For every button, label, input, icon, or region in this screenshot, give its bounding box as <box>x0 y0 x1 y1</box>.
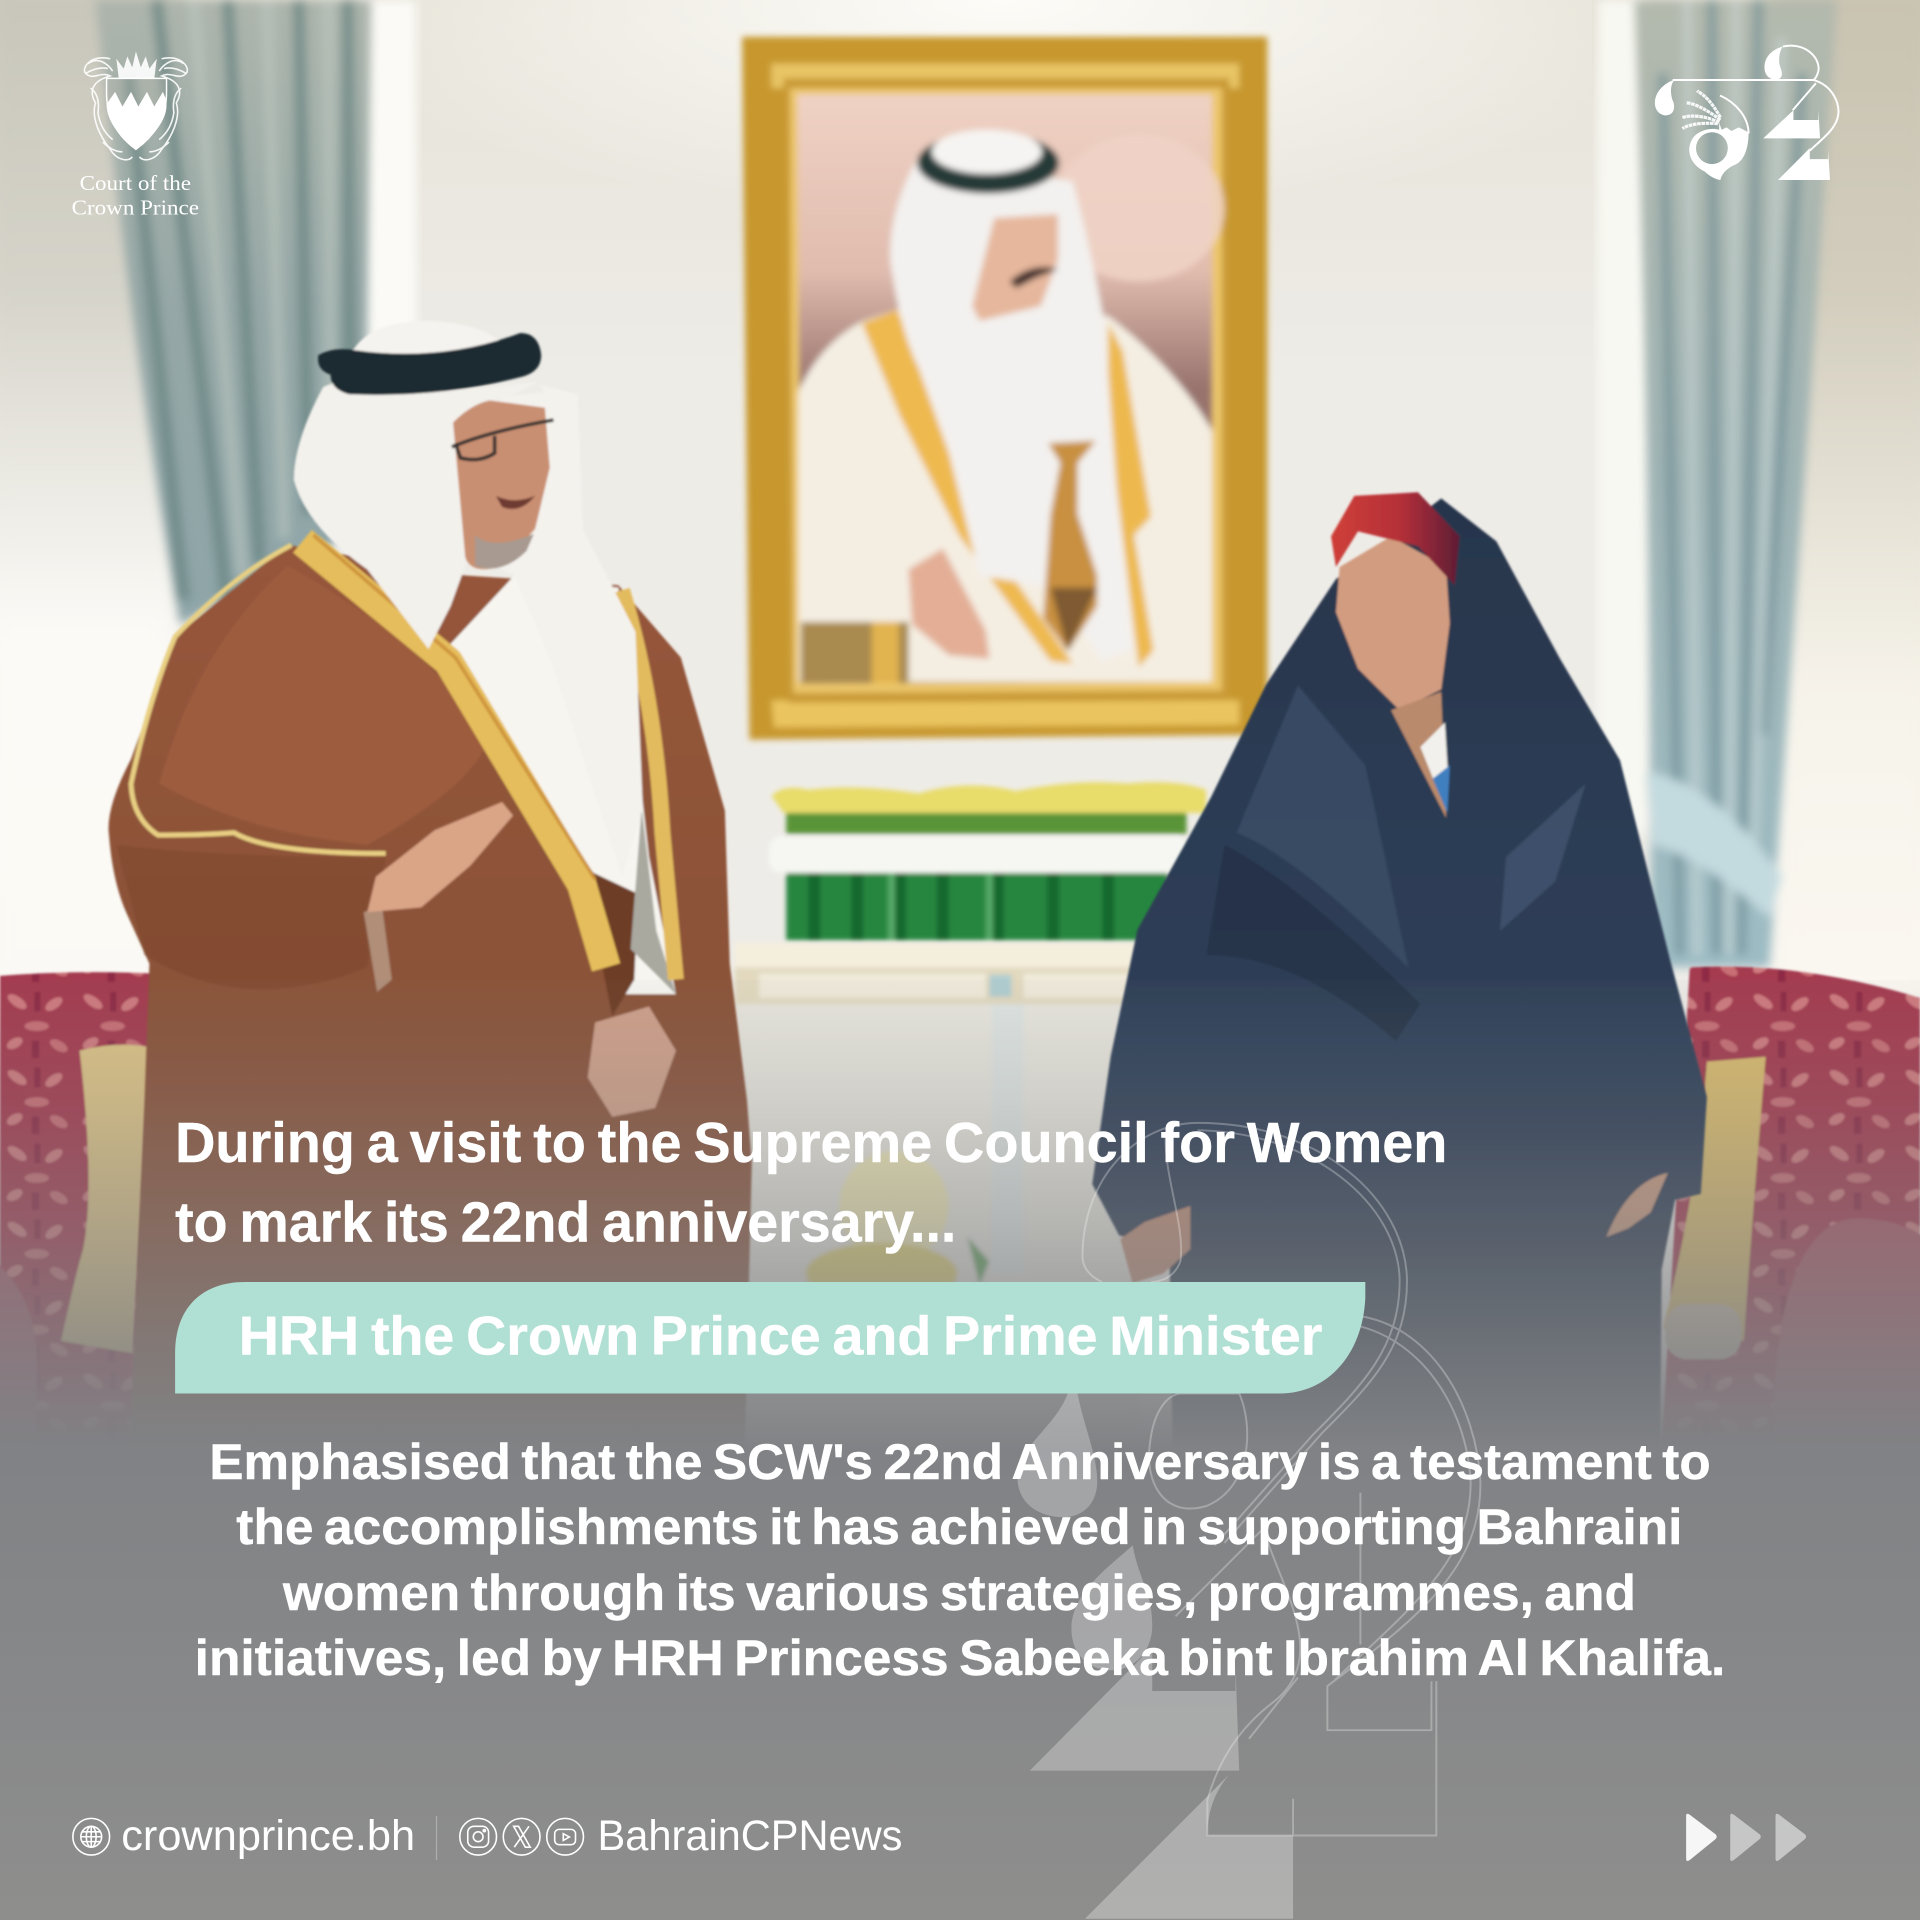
right hand <box>1607 1173 1668 1237</box>
filled triangle upper <box>1030 1647 1239 1771</box>
canvas cloud <box>1053 135 1224 282</box>
body text: initiatives, led by HRH Princess Sabeeka bint Ibrahim Al Khalifa. <box>195 1630 1725 1686</box>
footer: website and social handles <box>73 1812 902 1860</box>
bright strip beside left curtain <box>361 0 416 343</box>
crown <box>116 51 157 78</box>
beard <box>475 534 534 569</box>
body text <box>195 1434 1725 1686</box>
ring pearl shell <box>1689 122 1749 180</box>
arrows: next page <box>1686 1814 1806 1861</box>
crest label: Court of the <box>80 171 191 195</box>
curtain: right <box>1635 0 1837 967</box>
left wall corner <box>0 0 184 1029</box>
mouth <box>496 496 535 509</box>
body text: Emphasised that the SCW's 22nd Anniversary is a testament to <box>209 1434 1711 1490</box>
yellow roses <box>771 782 1206 813</box>
heading: visit context: During a visit to the Supreme Council for Women <box>175 1111 1447 1174</box>
pillow <box>1665 1304 1741 1359</box>
crest <box>84 51 187 160</box>
triangle upper <box>1763 110 1820 138</box>
canvas <box>797 94 1212 683</box>
heading: visit context: to mark its 22nd anniversary... <box>175 1191 956 1254</box>
clasped hands <box>588 1007 676 1117</box>
painted figure: chair <box>801 622 909 682</box>
filled triangle lower <box>1085 1774 1293 1919</box>
lower sleeve shade <box>116 845 386 989</box>
wall light glow <box>416 0 1592 367</box>
dark folds <box>1206 845 1420 1041</box>
body text: women through its various strategies, programmes, and <box>282 1565 1636 1621</box>
painted figure: dagger <box>1043 441 1097 651</box>
triangle lower <box>1778 148 1830 180</box>
painted figure: face <box>972 214 1058 321</box>
painted figure: hand <box>909 549 989 659</box>
chest gold trim <box>302 541 606 967</box>
inner dark sash belt <box>591 872 638 1016</box>
raised hand <box>367 802 513 912</box>
table flowers <box>839 1151 949 1261</box>
painted figure: agal <box>917 132 1059 193</box>
frame <box>742 37 1267 740</box>
painted figure: headdress <box>890 157 1133 661</box>
banner: HRH the Crown Prince and Prime Minister: HRH the Crown Prince and Prime Minister <box>239 1304 1322 1366</box>
left drop <box>1655 80 1675 115</box>
sofa: left <box>0 972 153 1592</box>
watermark: large stylised 22 <box>1017 1123 1480 1919</box>
handle: BahrainCPNews <box>598 1812 902 1860</box>
curtain: left <box>96 0 371 624</box>
arm <box>0 1249 37 1469</box>
palm fronds <box>1682 91 1720 129</box>
blouse white <box>1420 722 1449 784</box>
top drop <box>1764 47 1783 80</box>
ghutra headdress <box>294 384 643 877</box>
heading: visit context <box>175 1111 1447 1254</box>
left hand <box>1120 1206 1190 1283</box>
bright strip beside right curtain <box>1598 0 1647 833</box>
emblem: Court of the Crown Prince: Crown Prince <box>72 195 199 219</box>
greens <box>786 813 1187 834</box>
table <box>735 943 1139 1518</box>
face <box>1336 536 1450 710</box>
website: crownprince.bh <box>121 1812 415 1860</box>
painted figure: cap <box>932 130 1042 174</box>
face <box>453 400 550 569</box>
glasses <box>452 420 553 460</box>
mantling <box>84 58 187 160</box>
cushion <box>61 1045 149 1353</box>
icon: youtube <box>547 1818 583 1855</box>
cap <box>350 321 504 362</box>
painted figure: moustache <box>1011 268 1054 287</box>
icon: globe <box>73 1818 110 1855</box>
line work <box>1673 46 1838 151</box>
sleeve cuff <box>364 906 392 992</box>
logo: SCW 22 anniversary <box>1655 46 1838 180</box>
red hair <box>1331 492 1460 585</box>
filled drop upper <box>1017 1393 1097 1517</box>
sofa: right <box>1653 966 1920 1592</box>
emblem: Court of the Crown Prince <box>72 51 199 219</box>
arm <box>1773 1218 1920 1469</box>
person: woman in dark abaya <box>1092 492 1707 1616</box>
blouse blue <box>1433 765 1450 813</box>
icon: X <box>503 1818 540 1855</box>
portrait in gold frame <box>742 37 1267 740</box>
abaya <box>1092 498 1707 1616</box>
outline strokes <box>1082 1123 1480 1836</box>
sleeve piping <box>131 545 386 853</box>
inner white thobe <box>448 576 676 994</box>
white roses <box>769 836 1188 873</box>
flower arrangement <box>769 782 1206 940</box>
vase greens <box>786 873 1168 940</box>
robe <box>109 545 752 1616</box>
painted figure: gold sash <box>862 310 1073 664</box>
filled drop lower <box>1071 1545 1152 1670</box>
separator <box>436 1816 437 1860</box>
agal <box>318 333 541 395</box>
gradient overlay fading to grey <box>0 980 1920 1920</box>
body text: the accomplishments it has achieved in supporting Bahraini <box>236 1499 1682 1555</box>
person: man in brown bisht <box>109 321 752 1616</box>
icon: instagram <box>460 1818 497 1855</box>
neck <box>1391 692 1446 818</box>
right gold trim <box>622 590 676 980</box>
right wall corner <box>1763 0 1920 1029</box>
painted figure: robe <box>798 309 1212 682</box>
shield <box>107 78 167 149</box>
grey lining <box>631 808 676 994</box>
shoulder highlight <box>159 566 490 845</box>
cushion <box>1663 1057 1766 1341</box>
banner: HRH the Crown Prince and Prime Minister <box>175 1282 1365 1393</box>
light folds <box>1237 686 1408 967</box>
